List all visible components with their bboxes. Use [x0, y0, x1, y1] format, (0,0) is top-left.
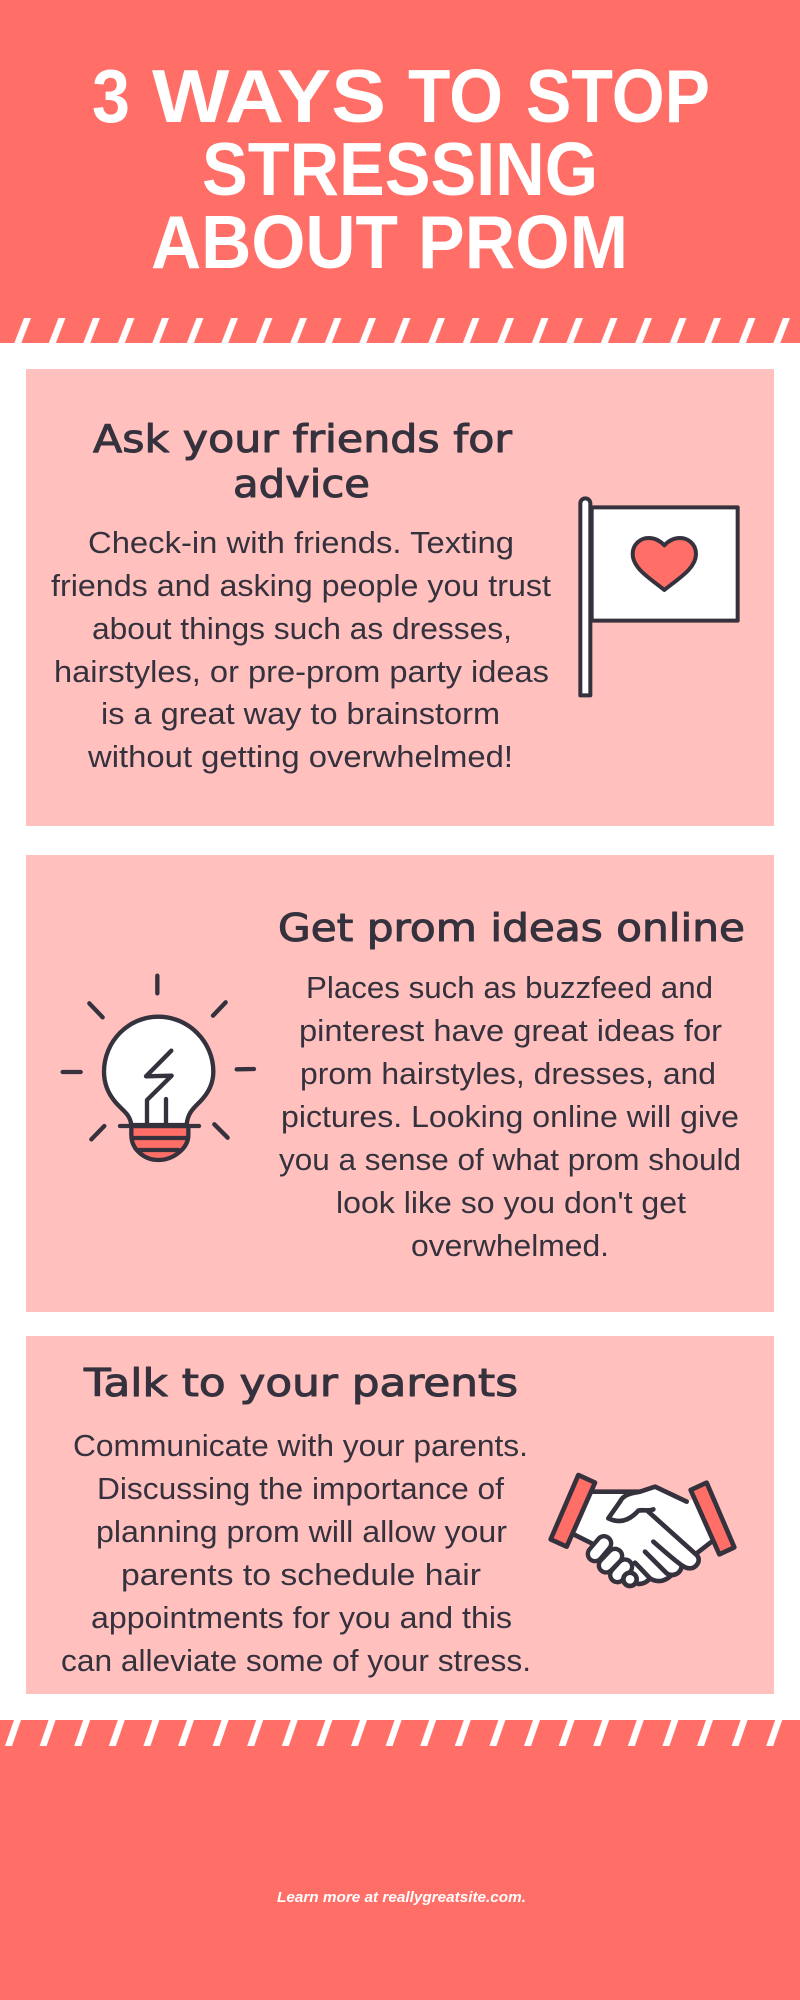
text block: prom ideas body: Places such as buzzfeed and: [306, 970, 713, 1005]
text block: prom ideas body: you a sense of what prom should: [279, 1142, 741, 1177]
text block: parents body: appointments for you and this: [91, 1600, 512, 1635]
panel: talk to your parents: [26, 1336, 774, 1694]
title: TO: [408, 54, 503, 138]
text block: prom ideas body: [279, 970, 741, 1263]
header band: [0, 0, 800, 343]
text block: ask friends body: friends and asking people you trust: [51, 568, 551, 603]
title: PROM: [418, 200, 628, 284]
text block: prom ideas body: overwhelmed.: [411, 1228, 609, 1263]
text block: prom ideas body: pinterest have great ideas for: [299, 1013, 722, 1048]
panel: get prom ideas online: [26, 855, 774, 1312]
text block: parents body: can alleviate some of your stress.: [61, 1643, 531, 1678]
title: STRESSING: [202, 127, 598, 211]
text block: ask friends body: [51, 525, 551, 774]
text block: prom ideas body: prom hairstyles, dresses, and: [300, 1056, 716, 1091]
heading: ask your friends for advice: Ask your friends for: [93, 417, 512, 461]
text block: parents body: planning prom will allow your: [96, 1514, 507, 1549]
text block: parents body: Discussing the importance of: [97, 1471, 504, 1506]
heading: ask your friends for advice: advice: [233, 462, 370, 506]
icon: light bulb: [63, 976, 254, 1160]
title: [92, 54, 710, 284]
text block: prom ideas body: look like so you don't get: [336, 1185, 686, 1220]
heading: get prom ideas online: Get prom ideas online: [278, 906, 745, 950]
text block: ask friends body: is a great way to brainstorm: [101, 696, 500, 731]
title: WAYS: [152, 54, 386, 138]
heading: ask your friends for advice: [93, 417, 512, 506]
text block: ask friends body: about things such as dresses,: [92, 611, 512, 646]
icon: handshake: [551, 1475, 734, 1586]
icon: flag with heart: [580, 498, 738, 695]
text block: ask friends body: hairstyles, or pre-prom party ideas: [54, 654, 549, 689]
text block: parents body: parents to schedule hair: [121, 1557, 481, 1592]
text block: ask friends body: without getting overwhelmed!: [87, 739, 513, 774]
title: ABOUT: [151, 200, 398, 284]
footer text: Learn more at reallygreatsite.com.: [277, 1889, 526, 1906]
text block: parents body: [61, 1428, 531, 1678]
panel: ask your friends: [26, 369, 774, 826]
footer band: [0, 1720, 800, 2000]
heading: talk to your parents: Talk to your parents: [83, 1361, 518, 1405]
title: 3: [92, 54, 130, 138]
text block: ask friends body: Check-in with friends. Texting: [88, 525, 514, 560]
title: STOP: [526, 54, 710, 138]
text block: parents body: Communicate with your parents.: [73, 1428, 528, 1463]
text block: prom ideas body: pictures. Looking online will give: [281, 1099, 739, 1134]
